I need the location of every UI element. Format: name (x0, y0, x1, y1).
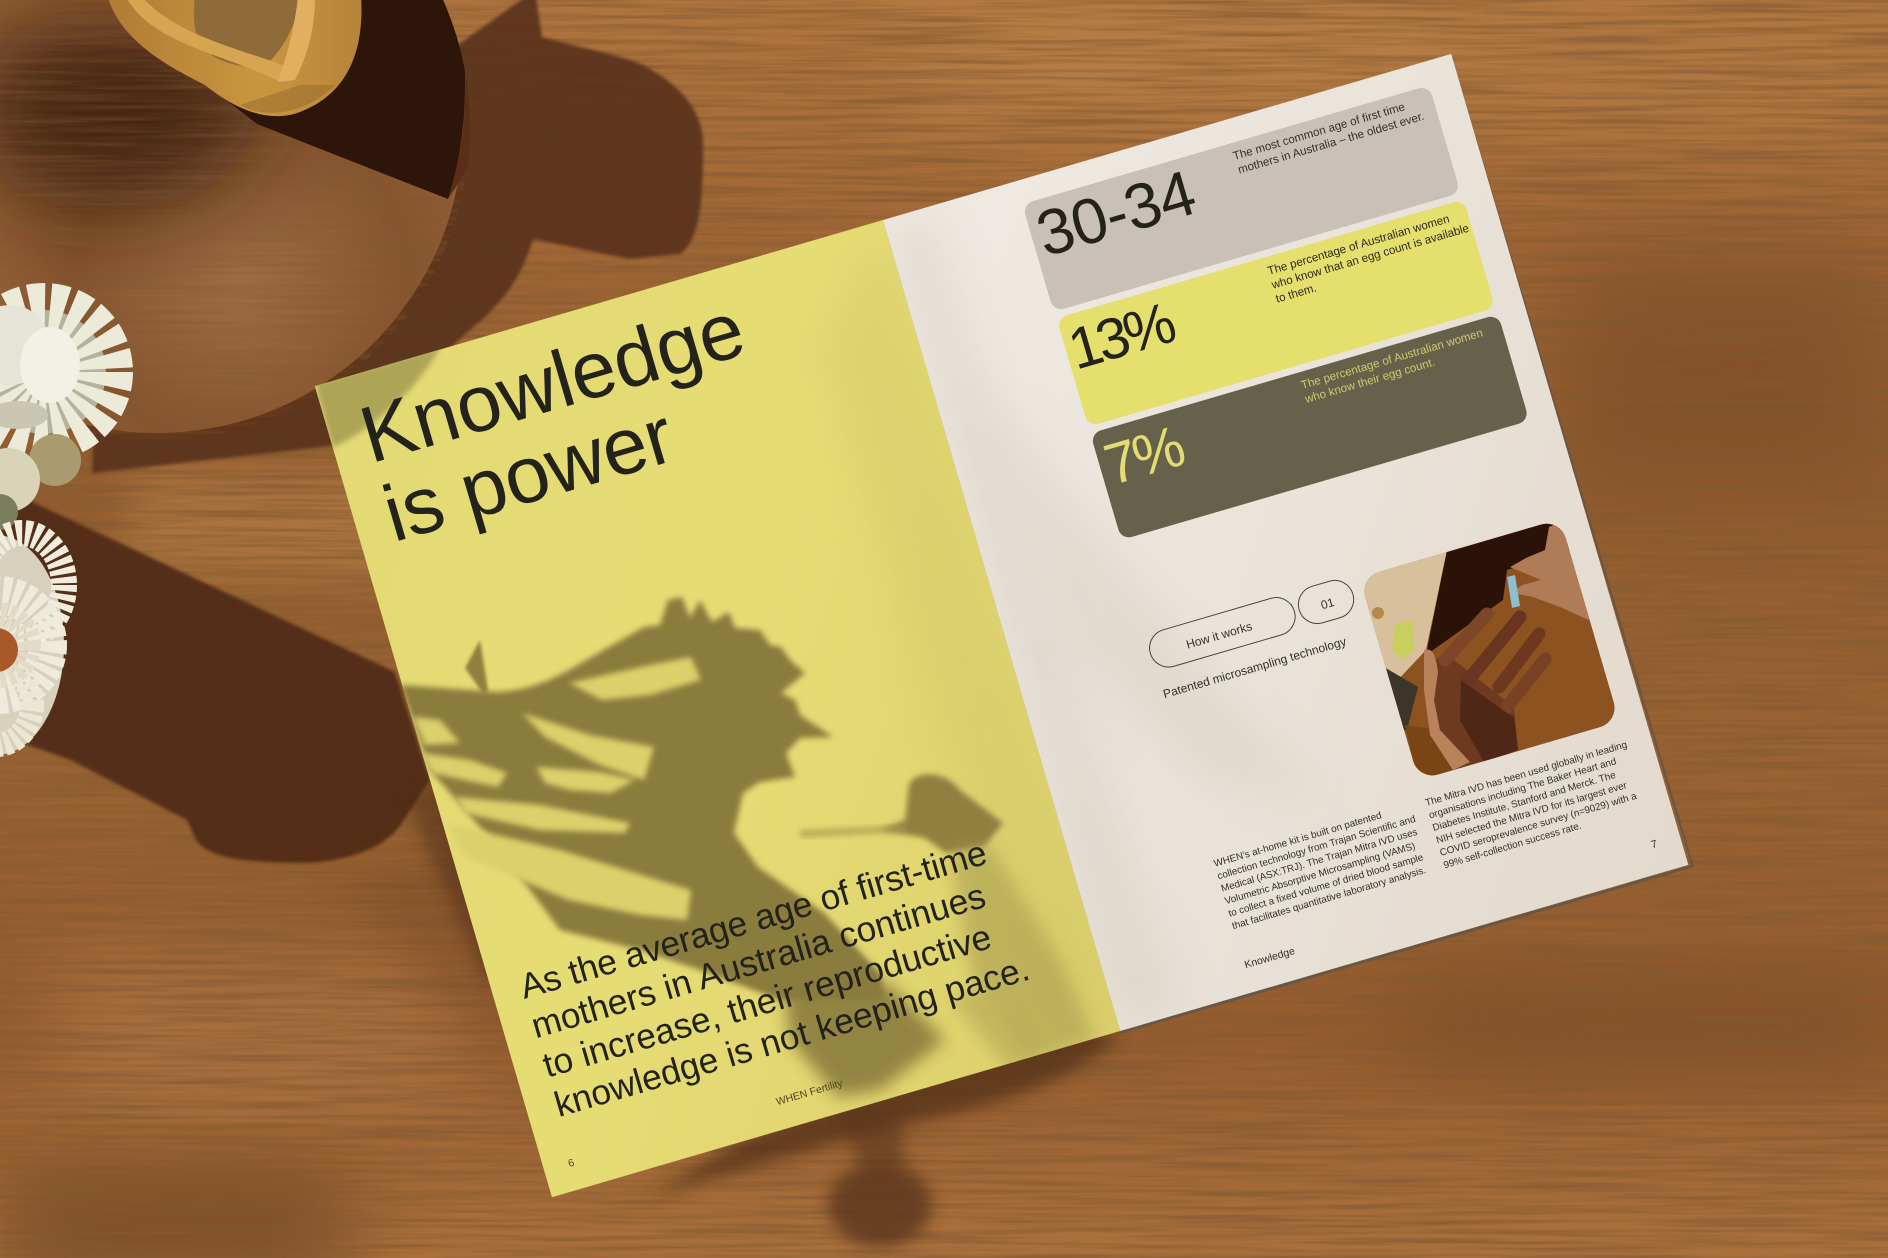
flower: lower daisy (0, 533, 64, 755)
body text column 1: Medical (ASX:TRJ). The Trajan Mitra IVD uses (1220, 827, 1419, 895)
body text column 1: Volumetric Absorptive Microsampling (VAMS) (1224, 841, 1417, 907)
body text column 2: 99% self-collection success rate. (1442, 821, 1583, 871)
page number 6: 6 (567, 1157, 576, 1170)
footer: WHEN Fertility: WHEN Fertility (775, 1077, 845, 1108)
photo: hands with microsampler (1364, 524, 1615, 776)
open magazine (315, 54, 1694, 1197)
body text column 2 (1424, 740, 1647, 871)
body text column 2: NIH selected the Mitra IVD for its largest ever (1435, 780, 1629, 846)
headline (351, 284, 777, 559)
wooden plate (0, 0, 470, 440)
stat card: 13% (1057, 199, 1495, 427)
stat card: 30-34 (1022, 84, 1461, 312)
ceramic jug (107, 0, 361, 116)
flower shadow and stem (800, 774, 1095, 1070)
body text column 2: COVID seroprevalence survey (n=9029) with a (1439, 791, 1638, 859)
stat card: 13%: 13% (1061, 290, 1182, 382)
stat card: 7% (1090, 314, 1529, 540)
right hand and vial (1507, 525, 1590, 620)
body text column 1: collection technology from Trajan Scientific and (1216, 814, 1417, 882)
stat card: 30-34: mothers in Australia – the oldest ever. (1237, 110, 1426, 177)
pill: How it works (1145, 593, 1300, 672)
stat card: 13%: The percentage of Australian women (1266, 212, 1451, 278)
body text column 2: organisations including The Baker Heart and (1428, 756, 1618, 821)
stat card: 30-34: 30-34 (1029, 156, 1203, 270)
intro paragraph: mothers in Australia continues (527, 876, 990, 1046)
flower: upper bloom (0, 305, 106, 434)
page number 7: 7 (1650, 838, 1659, 851)
page thickness edge (1118, 54, 1694, 1034)
right page: white (883, 54, 1688, 1032)
headline: is power (374, 390, 683, 559)
stat card: 7%: 7% (1097, 413, 1191, 498)
flower: small buds (0, 434, 81, 530)
pill: 01 (1294, 576, 1358, 628)
left hand (1424, 614, 1545, 770)
body text column 1: WHEN's at-home kit is built on patented (1213, 810, 1383, 870)
pill: 01: 01 (1319, 595, 1336, 612)
body text column 1: to collect a fixed volume of dried blood sample (1227, 852, 1425, 920)
body text column 2: The Mitra IVD has been used globally in leading (1424, 740, 1628, 809)
plant shadow on yellow page (315, 220, 1118, 1097)
intro paragraph (516, 831, 1034, 1125)
stat card: 13%: who know that an egg count is available (1269, 222, 1471, 292)
subheading: Patented microsampling technology (1161, 634, 1348, 701)
headline: Knowledge (351, 284, 754, 480)
white flowers (0, 305, 106, 755)
intro paragraph: knowledge is not keeping pace. (550, 949, 1034, 1125)
body text column 2: Diabetes Institute, Stanford and Merck. The (1431, 770, 1618, 834)
cast shadows on table (0, 0, 1120, 1247)
stat card: 13%: to them. (1274, 281, 1318, 306)
body text column 1 (1213, 801, 1432, 932)
stat card: 7%: who know their egg count. (1303, 356, 1437, 406)
sunlit gaps inside shadow (413, 657, 701, 920)
footer: Knowledge: Knowledge (1243, 945, 1296, 971)
left page: yellow (315, 220, 1120, 1197)
intro paragraph: As the average age of first-time (516, 833, 991, 1007)
pill: How it works: How it works (1184, 619, 1254, 652)
stat card: 30-34: The most common age of first time (1231, 100, 1406, 163)
intro paragraph: to increase, their reproductive (539, 917, 996, 1085)
stat card: 7%: The percentage of Australian women (1300, 327, 1484, 392)
body text column 1: that facilitates quantitative laboratory analysis. (1231, 865, 1427, 932)
